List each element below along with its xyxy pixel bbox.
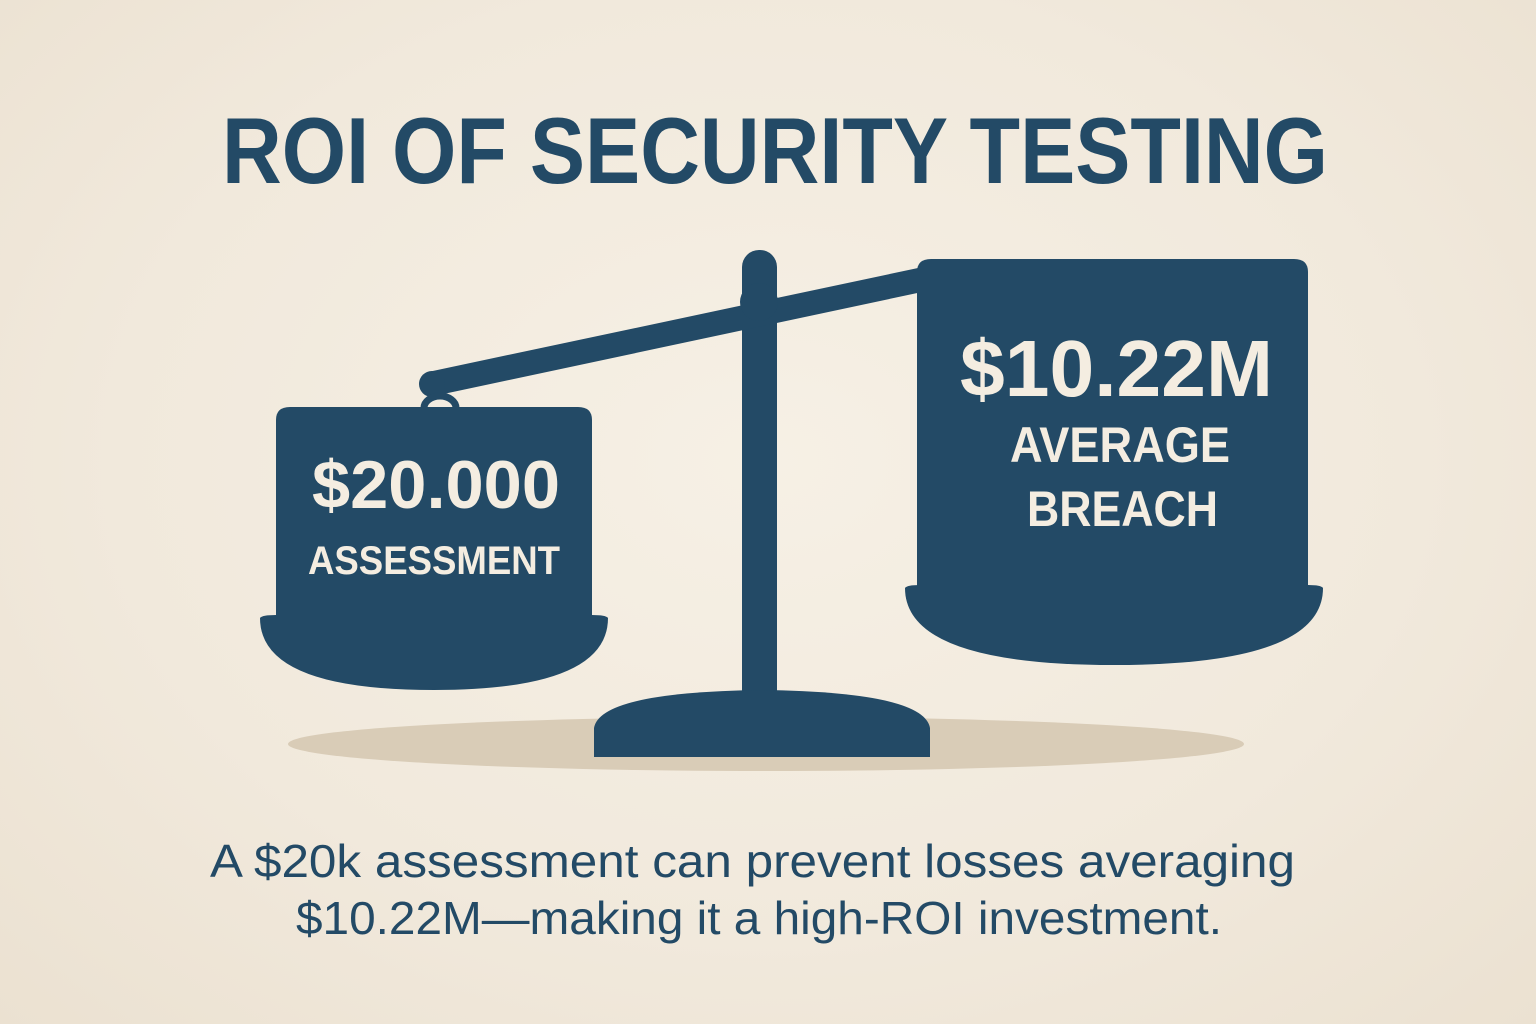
right pan text: BREACH: [1027, 481, 1218, 537]
pivot: [740, 283, 778, 321]
left pan: [260, 407, 608, 690]
right pan: [905, 259, 1323, 665]
shadow: [288, 717, 1244, 771]
base: [594, 690, 930, 757]
left pan text: $20.000: [312, 447, 560, 523]
post: [742, 250, 777, 710]
title: ROI OF SECURITY TESTING: [222, 98, 1328, 203]
beam: [428, 268, 922, 396]
left pan text: ASSESSMENT: [308, 539, 560, 583]
scale: [260, 250, 1323, 757]
caption: $10.22M—making it a high-ROI investment.: [296, 892, 1222, 944]
right pan text: [960, 324, 1273, 537]
left pan text: [308, 447, 560, 583]
right pan text: AVERAGE: [1010, 417, 1230, 473]
caption: A $20k assessment can prevent losses averaging: [210, 835, 1295, 887]
caption: [210, 835, 1295, 944]
right pan text: $10.22M: [960, 324, 1273, 413]
hook ring: [424, 396, 456, 420]
